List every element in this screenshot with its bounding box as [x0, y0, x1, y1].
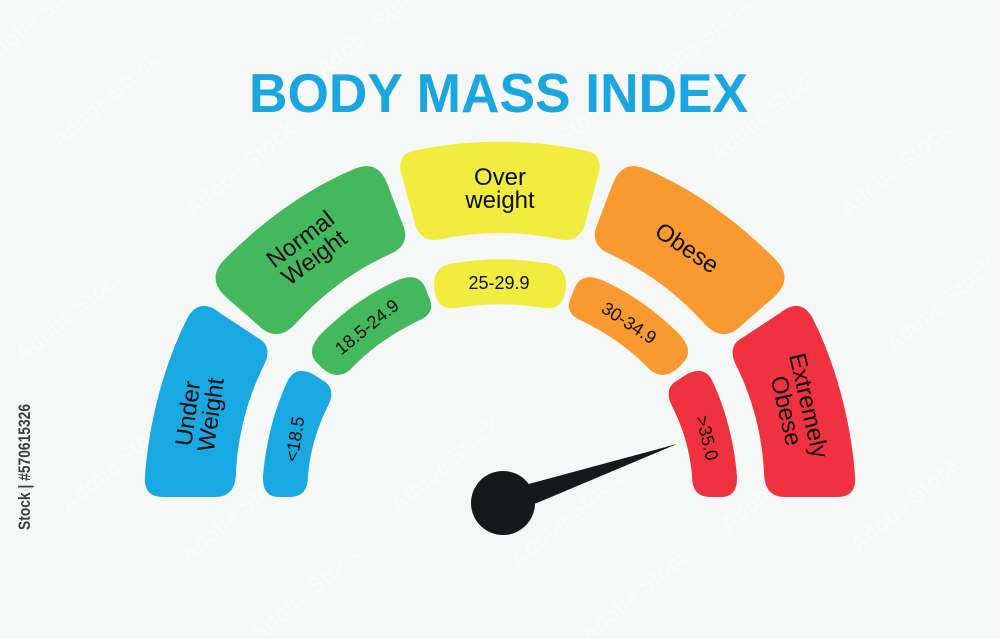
- range: 25 to 29.9: [434, 259, 566, 308]
- infographic: Adobe Stock: [181, 116, 300, 222]
- range: 25 to 29.9: 25-29.9: [468, 273, 530, 293]
- panel: over weight: Over: [474, 164, 526, 191]
- infographic: Adobe Stock: [506, 466, 625, 572]
- range: under 18.5: [263, 371, 331, 497]
- infographic: Adobe Stock: [496, 91, 615, 197]
- panel: extremely obese: Extremely: [783, 351, 833, 461]
- panel: under weight: [145, 306, 267, 497]
- panel: obese: [595, 166, 784, 334]
- title: BODY MASS INDEX: [249, 62, 748, 124]
- range: 18.5 to 24.9: 18.5-24.9: [331, 295, 403, 359]
- panel: over weight: weight: [464, 187, 535, 214]
- infographic: Adobe Stock: [46, 46, 165, 152]
- gauge needle: [471, 444, 677, 535]
- infographic: Adobe Stock: [706, 61, 825, 167]
- panel: under weight: Weight: [193, 376, 230, 453]
- panel: over weight: [400, 142, 600, 240]
- infographic: Adobe Stock: [846, 451, 965, 557]
- panel: under weight: Under: [170, 379, 206, 448]
- infographic: Adobe Stock: [881, 251, 1000, 357]
- range: 30 to 34.9: 30-34.9: [598, 298, 660, 348]
- infographic: Adobe Stock: [56, 411, 175, 517]
- range: over 35: [669, 371, 737, 497]
- panel: extremely obese: Obese: [765, 373, 807, 448]
- infographic: Adobe Stock: [716, 431, 835, 537]
- panel: extremely obese: [733, 306, 855, 497]
- infographic: Adobe Stock: [386, 411, 505, 517]
- panel: normal weight: [216, 166, 405, 334]
- panel: normal weight: Weight: [277, 225, 353, 291]
- infographic: Adobe Stock: [176, 461, 295, 567]
- range: 18.5 to 24.9: [312, 277, 431, 375]
- range: under 18.5: <18.5: [282, 415, 308, 463]
- infographic: Adobe Stock: [11, 261, 130, 367]
- panel: normal weight: Normal: [262, 206, 340, 274]
- range: 30 to 34.9: [569, 277, 688, 375]
- panel: obese: Obese: [650, 217, 724, 279]
- range: over 35: >35.0: [692, 413, 722, 463]
- stock id side text: Stock | #570615326: [15, 404, 34, 530]
- infographic: Adobe Stock: [836, 116, 955, 222]
